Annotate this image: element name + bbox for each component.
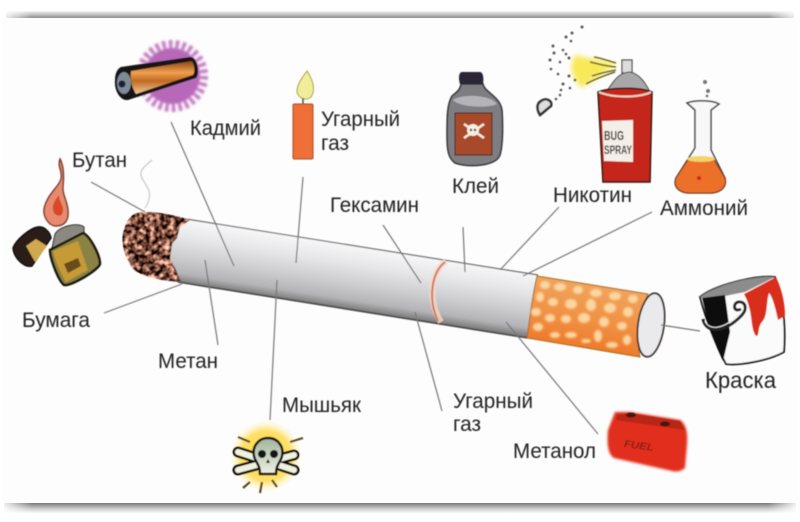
Угарный: Угарный xyxy=(453,390,533,413)
vapor bubbles xyxy=(703,80,710,97)
bottle label xyxy=(455,113,492,155)
label: Никотин: Никотин xyxy=(553,184,632,207)
lighter top xyxy=(52,225,84,248)
cigarette top edge xyxy=(186,219,538,275)
liquid surface xyxy=(687,156,715,162)
skull rays xyxy=(238,437,303,493)
candle flame xyxy=(297,71,314,99)
nozzle xyxy=(622,60,632,73)
spray mist xyxy=(571,55,617,88)
icon: arsenic skull xyxy=(230,420,303,493)
can label xyxy=(602,120,633,162)
callout lines xyxy=(91,122,700,434)
газ: газ xyxy=(321,132,349,155)
can handle shine xyxy=(705,313,740,327)
label: Бумага: Бумага xyxy=(22,309,90,332)
icon: lighter xyxy=(13,159,100,285)
can label text: BUG xyxy=(604,128,624,143)
Угарный: Угарный xyxy=(321,108,400,131)
can handle xyxy=(703,302,745,329)
fuel can openings xyxy=(626,412,670,426)
label: Аммоний: Аммоний xyxy=(660,197,748,220)
flask liquid xyxy=(675,158,725,193)
fuel can label: FUEL xyxy=(623,439,654,454)
fuel can body xyxy=(608,412,687,472)
fly xyxy=(538,99,551,115)
icon: bug spray can xyxy=(538,26,652,182)
can side xyxy=(700,277,785,364)
label: Кадмий: Кадмий xyxy=(190,117,261,140)
icon: cadmium battery xyxy=(115,44,204,108)
cigarette xyxy=(122,212,668,358)
bottle body xyxy=(447,84,503,166)
battery casing xyxy=(115,57,198,100)
lighter lid xyxy=(13,227,51,266)
filter speckles xyxy=(531,281,638,348)
icon: fuel can xyxy=(608,412,687,472)
filter end xyxy=(634,292,668,358)
label: Краска: Краска xyxy=(705,367,776,393)
bottle skull xyxy=(464,124,484,138)
icon: paint can xyxy=(700,277,785,364)
label: Мышьяк: Мышьяк xyxy=(282,394,362,417)
skull eyes xyxy=(258,450,278,463)
label: Бутан: Бутан xyxy=(72,149,127,172)
can lid xyxy=(700,277,775,300)
icon: glue bottle xyxy=(447,72,503,166)
can rim xyxy=(599,92,651,96)
fuel can top xyxy=(616,413,685,430)
icon: candle xyxy=(293,71,314,159)
black paint side xyxy=(702,295,730,361)
can body xyxy=(598,88,652,182)
bottle highlight xyxy=(453,96,497,107)
bottle cap xyxy=(459,72,483,84)
label: Угарный газ, lower xyxy=(453,390,533,436)
cigarette paper body xyxy=(165,216,538,338)
icon: ammonia flask xyxy=(675,80,725,193)
can dome xyxy=(606,72,650,92)
bottom card shadow xyxy=(4,503,796,513)
spray droplets xyxy=(548,26,584,100)
battery terminal xyxy=(117,72,131,94)
can label text 2: SPRAY xyxy=(604,143,632,157)
label: Гексамин: Гексамин xyxy=(330,194,419,217)
газ: газ xyxy=(453,413,481,436)
lighter front panel xyxy=(53,241,88,282)
burnt tobacco tip xyxy=(122,212,190,281)
flask glass xyxy=(675,101,725,193)
candle body xyxy=(293,104,313,159)
skull head xyxy=(254,438,282,474)
icon: smoke wisp xyxy=(141,160,152,208)
yellow glow xyxy=(230,420,302,492)
label: Метан: Метан xyxy=(158,350,218,373)
cigarette bottom edge xyxy=(178,282,528,338)
lighter flame xyxy=(44,159,68,226)
orange filter xyxy=(527,276,648,357)
paper ring xyxy=(432,261,446,322)
liquid bubble xyxy=(697,176,701,180)
lighter body xyxy=(50,233,100,285)
label: Клей: Клей xyxy=(452,175,499,198)
wick xyxy=(302,98,304,105)
top card shadow xyxy=(6,11,794,18)
label: Метанол: Метанол xyxy=(513,440,596,463)
red paint drip xyxy=(744,277,785,336)
lighter engraving xyxy=(64,258,81,273)
battery copper sleeve xyxy=(131,61,194,94)
purple burst xyxy=(140,44,204,108)
label: Угарный газ, upper xyxy=(321,108,400,155)
spray streaks xyxy=(586,57,616,84)
crossbones xyxy=(238,452,294,470)
